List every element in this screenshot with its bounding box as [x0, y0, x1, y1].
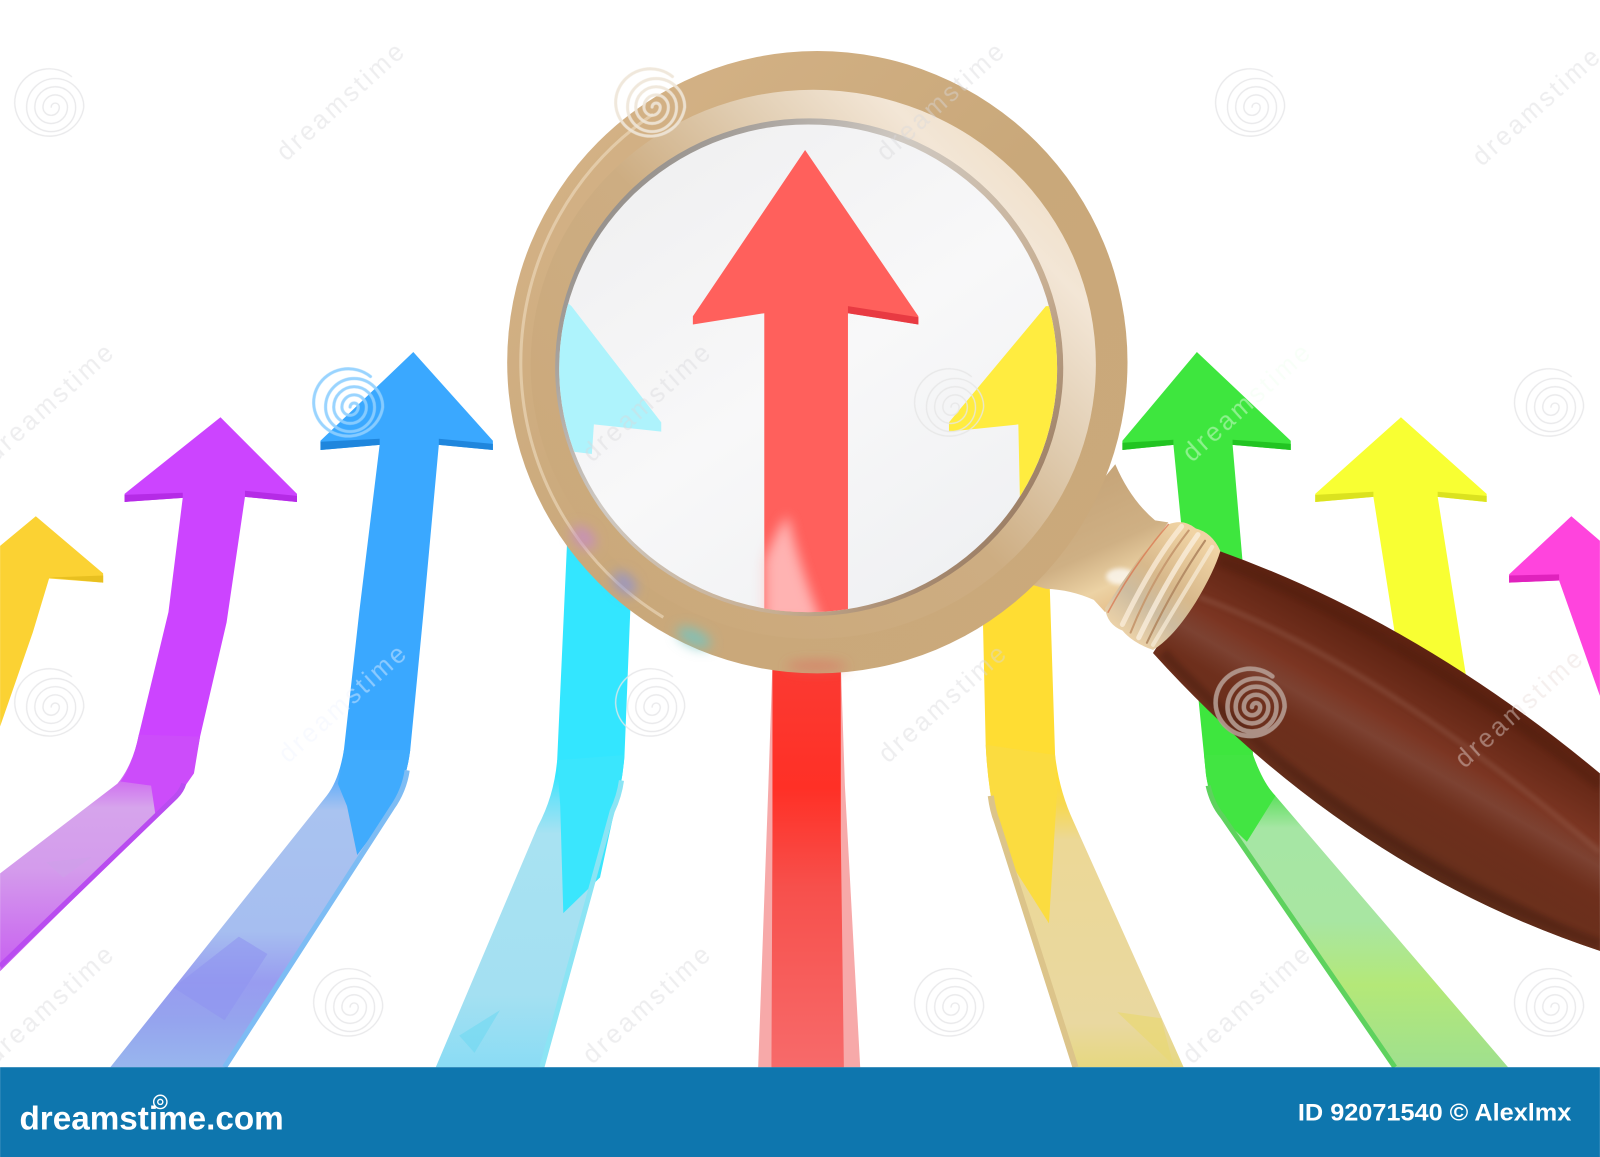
watermark: dreamstime text: dreamstime — [1177, 939, 1318, 1069]
lens: reflection on red shaft — [764, 515, 821, 622]
watermark: dreamstime text: dreamstime — [577, 337, 718, 467]
arrow: red — [758, 663, 860, 1067]
arrow: blue — [110, 352, 493, 1067]
iridescent rim reflections — [567, 521, 847, 671]
footer bar — [0, 1067, 1600, 1157]
magnifier neck — [1020, 464, 1168, 612]
lens: magnified yellow arrow — [948, 306, 1058, 497]
watermark: dreamstime text: dreamstime — [871, 36, 1012, 166]
watermark: dreamstime text: dreamstime — [1450, 643, 1590, 773]
arrow: cyan — [436, 536, 631, 1067]
magnifier gold rim — [507, 51, 1128, 673]
arrow: magenta far right — [1509, 516, 1600, 696]
magnifier handle: wood — [1153, 551, 1600, 951]
watermark: dreamstime text: dreamstime — [273, 638, 414, 768]
magnifier collar — [1105, 522, 1220, 650]
watermark: dreamstime text: dreamstime — [271, 36, 412, 166]
watermark: dreamstime text: dreamstime — [1177, 337, 1318, 467]
arrow: orange-yellow far left — [0, 516, 103, 726]
footer logo spiral — [154, 1095, 167, 1109]
icon: magnifying glass — [507, 51, 1600, 951]
arrow: green — [1122, 352, 1508, 1067]
arrow: yellow right — [982, 561, 1184, 1067]
watermark: dreamstime text: dreamstime — [577, 939, 718, 1069]
arrow: lime yellow — [1315, 417, 1487, 684]
lens: magnified cyan arrow — [559, 304, 662, 454]
arrow: purple — [0, 417, 297, 971]
lens: magnified red arrow — [693, 150, 918, 622]
watermark: dreamstime text: dreamstime — [873, 638, 1014, 768]
footer logo text: dreamstime.com — [19, 1100, 284, 1137]
footer image id and author: ID 92071540 © Alexlmx — [1298, 1099, 1572, 1126]
lens — [551, 124, 1066, 622]
